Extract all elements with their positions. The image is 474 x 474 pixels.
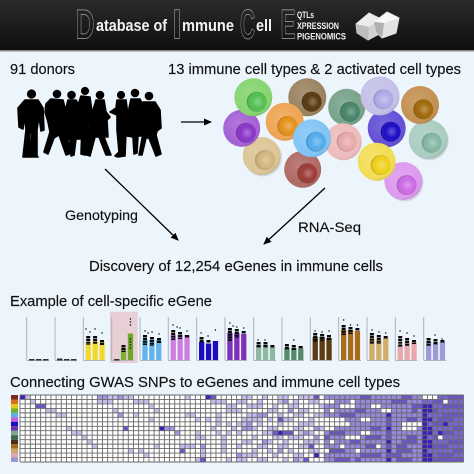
title: Database of Immune Cell Expression: D (76, 0, 94, 48)
label: Genotyping: Genotyping (65, 207, 138, 223)
title: Database of Immune Cell Expression: atabase of (96, 16, 167, 35)
title: Database of Immune Cell Expression: C (240, 0, 255, 48)
arrow: RNA-Seq (264, 188, 325, 244)
arrow: genotyping (105, 169, 178, 240)
title: Database of Immune Cell Expression: I (172, 0, 182, 48)
header banner (0, 0, 474, 52)
heading: connecting GWAS: Connecting GWAS SNPs to eGenes and immune cell types (10, 375, 400, 391)
title: Database of Immune Cell Expression: QTLs (297, 10, 314, 21)
title: Database of Immune Cell Expression: PIGENOMICS (297, 32, 346, 42)
illustration: immune cells (223, 76, 449, 202)
text: cell types heading: 13 immune cell types & 2 activated cell types (168, 62, 461, 78)
axes (27, 317, 446, 360)
title: Database of Immune Cell Expression: E (280, 0, 296, 48)
bar chart: expression per cell type (27, 317, 446, 360)
bars (29, 330, 445, 360)
highlight: cell-specific panel (110, 312, 138, 363)
data points: outliers (86, 319, 442, 348)
data points: dense clusters (88, 325, 442, 352)
grid lines (20, 395, 464, 462)
title: Database of Immune Cell Expression: ell (256, 16, 272, 35)
text: 91 donors: 91 donors (10, 62, 75, 78)
legend: cell type colour strip (11, 395, 18, 462)
title: Database of Immune Cell Expression: XPRESSION (297, 21, 339, 32)
text: discovery: Discovery of 12,254 eGenes in immune cells (89, 259, 383, 275)
icon: donor silhouettes (18, 88, 161, 157)
title: Database of Immune Cell Expression (76, 0, 346, 48)
heatmap: GWAS SNPs by immune cell type (20, 395, 464, 462)
title: Database of Immune Cell Expression: mmune (182, 16, 234, 35)
arrow: donors to cells (181, 121, 211, 123)
heading: example eGene: Example of cell-specific eGene (10, 294, 212, 310)
label: RNA-Seq: RNA-Seq (298, 219, 361, 235)
icon: cubes (356, 12, 399, 40)
